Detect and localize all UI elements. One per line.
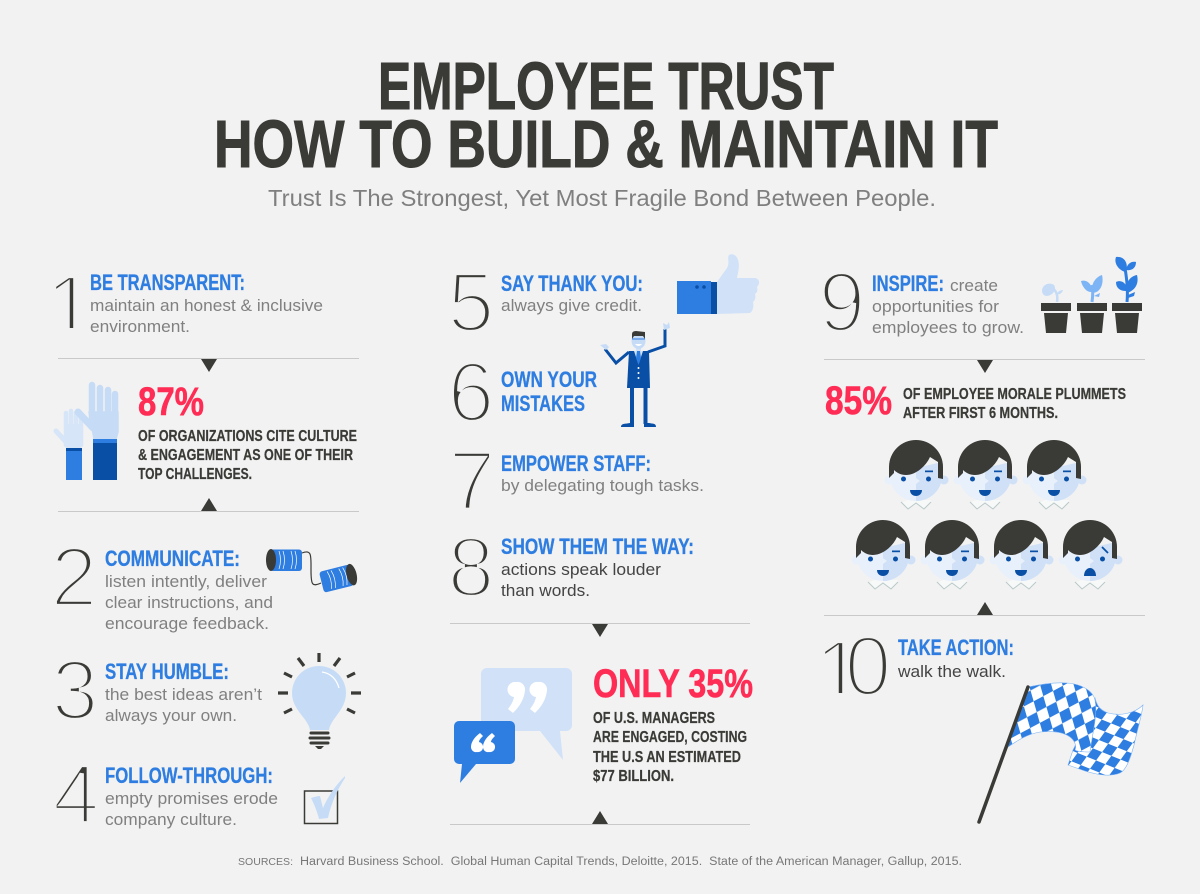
arrow up: [201, 498, 217, 511]
text 5: always give credit.: [501, 296, 642, 315]
panel: item 9 inspire: [819, 255, 1142, 349]
panel: item 7 empower staff: [449, 434, 704, 528]
panel: item 10 take action: [825, 638, 1144, 824]
sources: SOURCES:: [238, 856, 293, 868]
text 8: [501, 560, 661, 600]
number 5: 5: [448, 255, 494, 349]
icon: speech bubbles: [454, 668, 572, 783]
stat 87%: 87%: [138, 380, 204, 424]
text 2: clear instructions, and: [105, 593, 273, 612]
arrow up: [592, 811, 608, 824]
number 10: 0: [845, 619, 891, 713]
title: [214, 50, 998, 182]
number 3: 3: [52, 643, 98, 737]
panel: 85% statistic: [824, 359, 1145, 616]
text 8: actions speak louder: [501, 560, 661, 579]
number 2: 2: [51, 530, 97, 624]
text 9: create: [950, 276, 998, 295]
icon: growing plants: [1041, 257, 1142, 333]
stat caption: OF EMPLOYEE MORALE PLUMMETS: [903, 386, 1126, 403]
number 10: 1: [815, 623, 863, 720]
panel: item 8 show them the way: [448, 520, 694, 614]
stat caption: & ENGAGEMENT AS ONE OF THEIR: [138, 447, 353, 464]
text 9: [872, 276, 1024, 337]
heading 3: STAY HUMBLE:: [105, 659, 229, 684]
arrow down: [977, 360, 993, 373]
panel: item 1 be transparent: [56, 274, 322, 332]
heading 8: SHOW THEM THE WAY:: [501, 534, 694, 559]
heading 5: SAY THANK YOU:: [501, 271, 643, 296]
arrow down: [201, 359, 217, 372]
stat caption: [593, 710, 747, 785]
number 8: 8: [448, 520, 494, 614]
icon: raised hands: [56, 385, 118, 480]
arrow down: [592, 624, 608, 637]
text 7: by delegating tough tasks.: [501, 476, 704, 495]
text 9: opportunities for: [872, 297, 999, 316]
stat caption: AFTER FIRST 6 MONTHS.: [903, 405, 1058, 422]
title: EMPLOYEE TRUST: [378, 50, 834, 124]
text 4: [105, 789, 278, 829]
heading 6: [501, 367, 597, 416]
sources: Harvard Business School. Global Human Capital Trends, Deloitte, 2015. State of the American Manager, Gallup, 2015.: [300, 856, 962, 868]
panel: item 6 own your mistakes: [448, 322, 670, 439]
panel: 87% statistic: [56, 358, 359, 512]
number 6: 6: [448, 345, 494, 439]
text 1: environment.: [90, 317, 190, 336]
heading 7: EMPOWER STAFF:: [501, 451, 651, 476]
icon: light bulb: [278, 653, 361, 749]
text 10: walk the walk.: [897, 662, 1006, 681]
stat caption: [138, 428, 357, 483]
stat caption: [903, 386, 1126, 422]
text 2: encourage feedback.: [105, 614, 269, 633]
panel: item 3 stay humble: [52, 643, 361, 749]
text 1: [90, 296, 323, 336]
panel: only 35% statistic: [450, 623, 753, 825]
number 1: 1: [46, 258, 94, 355]
text 1: maintain an honest & inclusive: [90, 296, 323, 315]
text 2: [105, 572, 273, 633]
heading 1: BE TRANSPARENT:: [90, 270, 245, 295]
stat 85%: 85%: [825, 379, 892, 423]
text 3: [105, 685, 262, 725]
icon: thumbs up: [677, 254, 759, 314]
icon: checkered flag: [979, 683, 1143, 822]
heading 10: TAKE ACTION:: [898, 635, 1014, 660]
panel: item 4 follow-through: [53, 747, 345, 841]
heading 6: OWN YOUR: [501, 367, 597, 392]
text 9: employees to grow.: [872, 318, 1024, 337]
heading 4: FOLLOW-THROUGH:: [105, 763, 273, 788]
text 8: than words.: [501, 581, 590, 600]
text 4: empty promises erode: [105, 789, 278, 808]
icon: employee faces: [852, 440, 1122, 589]
icon: checkbox: [304, 776, 345, 824]
number 7: 7: [449, 434, 495, 528]
text 3: always your own.: [105, 706, 237, 725]
arrow up: [977, 602, 993, 615]
title: HOW TO BUILD & MAINTAIN IT: [214, 108, 998, 182]
stat caption: TOP CHALLENGES.: [138, 466, 252, 483]
stat caption: OF ORGANIZATIONS CITE CULTURE: [138, 428, 357, 445]
stat caption: ARE ENGAGED, COSTING: [593, 729, 747, 746]
icon: businessman: [600, 322, 670, 427]
icon: tin can telephone: [266, 549, 359, 593]
stat caption: THE U.S AN ESTIMATED: [593, 749, 741, 766]
stat only 35%: ONLY 35%: [593, 662, 753, 706]
text 4: company culture.: [105, 810, 237, 829]
panel: item 5 say thank you: [448, 254, 759, 349]
number 10: [825, 638, 886, 694]
stat caption: OF U.S. MANAGERS: [593, 710, 715, 727]
number 9: 9: [819, 255, 865, 349]
text 2: listen intently, deliver: [105, 572, 267, 591]
heading 2: COMMUNICATE:: [105, 546, 240, 571]
heading 9: INSPIRE:: [872, 271, 944, 296]
text 3: the best ideas aren’t: [105, 685, 262, 704]
stat caption: $77 BILLION.: [593, 768, 674, 785]
subtitle: Trust Is The Strongest, Yet Most Fragile Bond Between People.: [268, 185, 936, 211]
number 4: 4: [53, 747, 99, 841]
heading 6: MISTAKES: [501, 391, 585, 416]
panel: item 2 communicate: [51, 530, 359, 633]
